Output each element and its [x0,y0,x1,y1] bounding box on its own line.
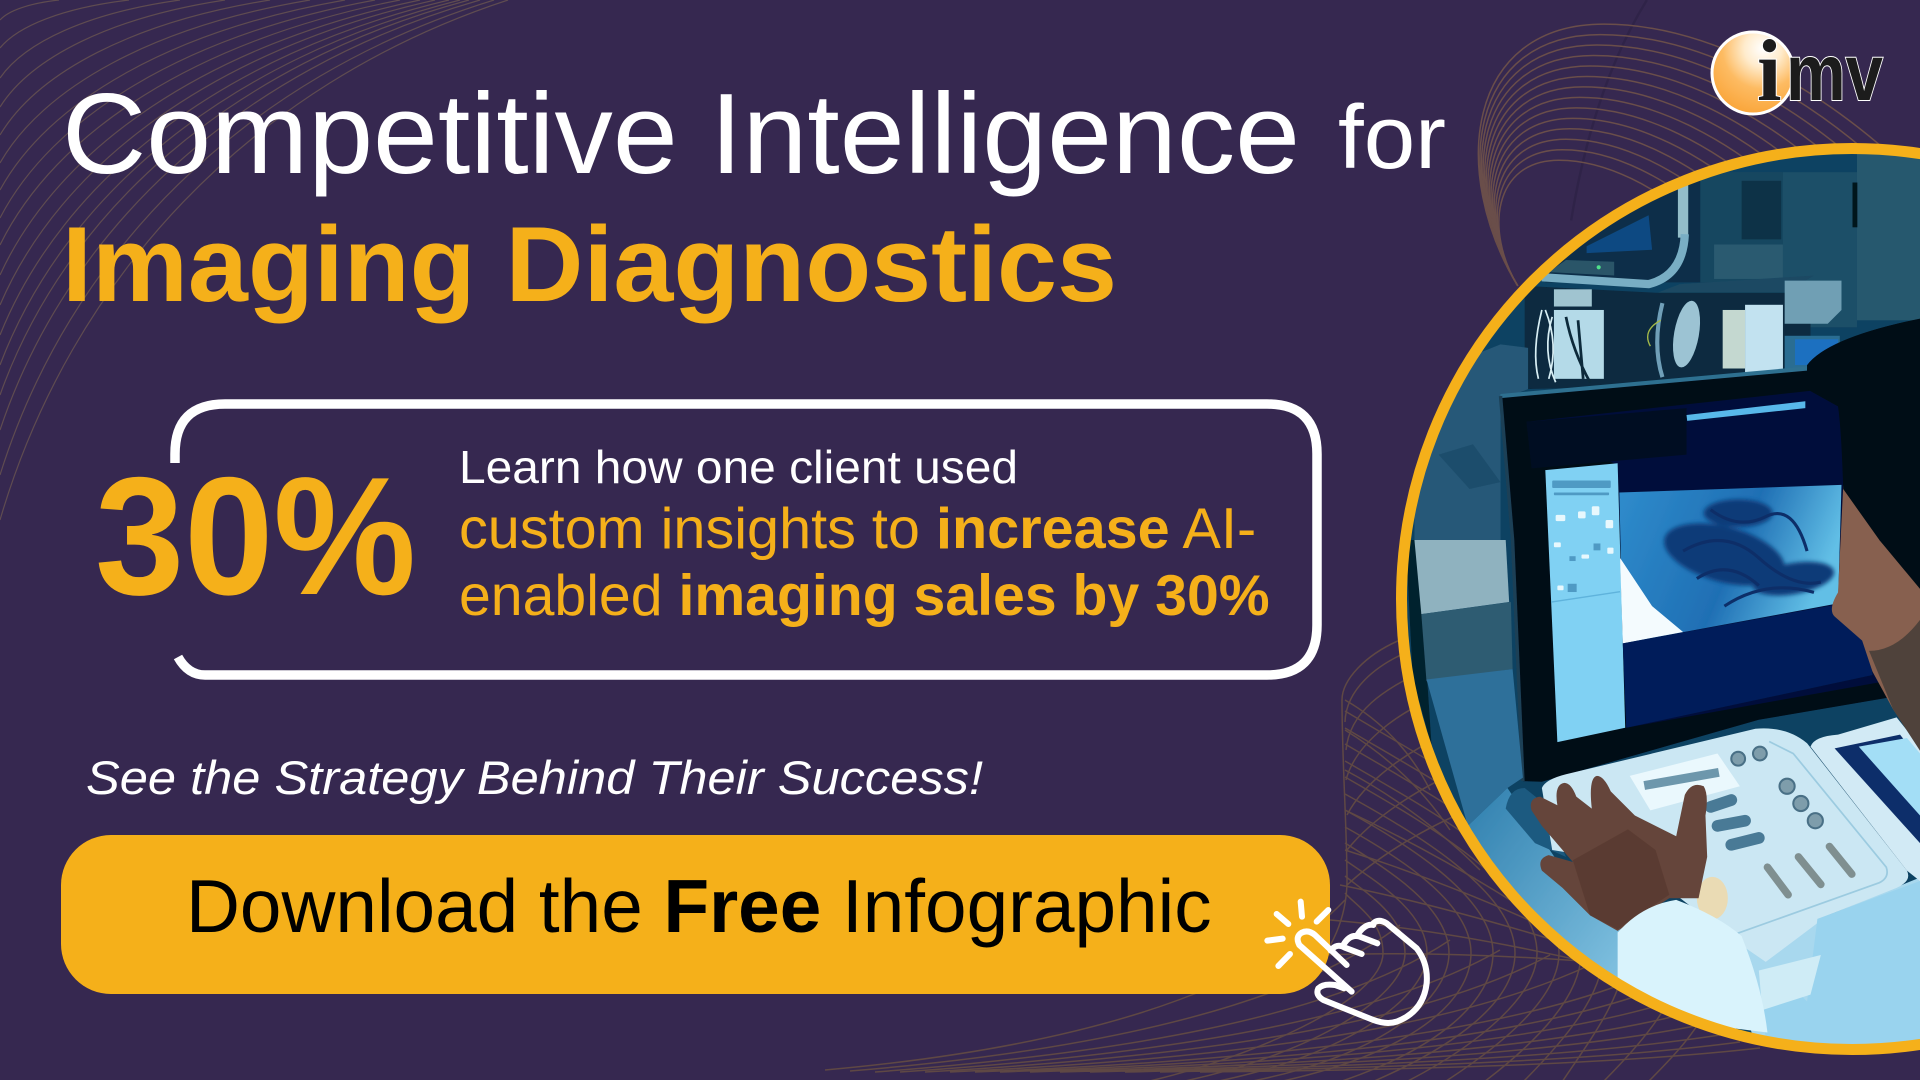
big stat: 30% [95,442,416,630]
tagline: See the Strategy Behind Their Success! [86,751,983,804]
logo: imv: mv [1786,28,1883,117]
cyan tool panel [1545,463,1625,742]
wave lines: top right [1478,0,1879,286]
gold ring around photo [1402,148,1920,1050]
mesh cross lines [1320,700,1630,965]
technician head [1832,486,1920,714]
tablet [1810,717,1920,881]
wave lines: top left [0,0,508,520]
equipment room background [1414,148,1920,540]
download button: Download the Free Infographic [186,864,1212,948]
callout text: enabled imaging sales by 30% [459,564,1270,628]
ultrasound image [1619,485,1841,643]
icon: clicking hand [1267,902,1427,1023]
mesh edge and rising arcs [1300,640,1482,985]
console [1542,728,1908,962]
title line one: for [1338,88,1446,188]
wave mesh: bottom right [825,640,1760,1080]
callout box [175,404,1317,675]
hand [1531,776,1707,931]
logo: imv: i [1757,23,1781,120]
callout text: custom insights to increase AI- [459,497,1256,561]
logo: imv [1712,23,1883,120]
callout text [459,441,1270,628]
monitor screen [1528,391,1881,728]
mesh bottom fan [825,900,1760,1072]
title line one: Competitive Intelligence [62,71,1300,198]
coat and sleeve [1764,881,1920,1044]
console underside [1746,878,1920,1036]
mesh bulging curves [1132,711,1710,1080]
download button [61,835,1330,994]
monitor bezel [1502,370,1887,782]
photo: technician at ultrasound console [1407,154,1920,1044]
title line two: Imaging Diagnostics [62,204,1117,324]
lower area, coordinates relative to y=540 [1406,540,1920,1057]
callout text: Learn how one client used [459,441,1018,493]
